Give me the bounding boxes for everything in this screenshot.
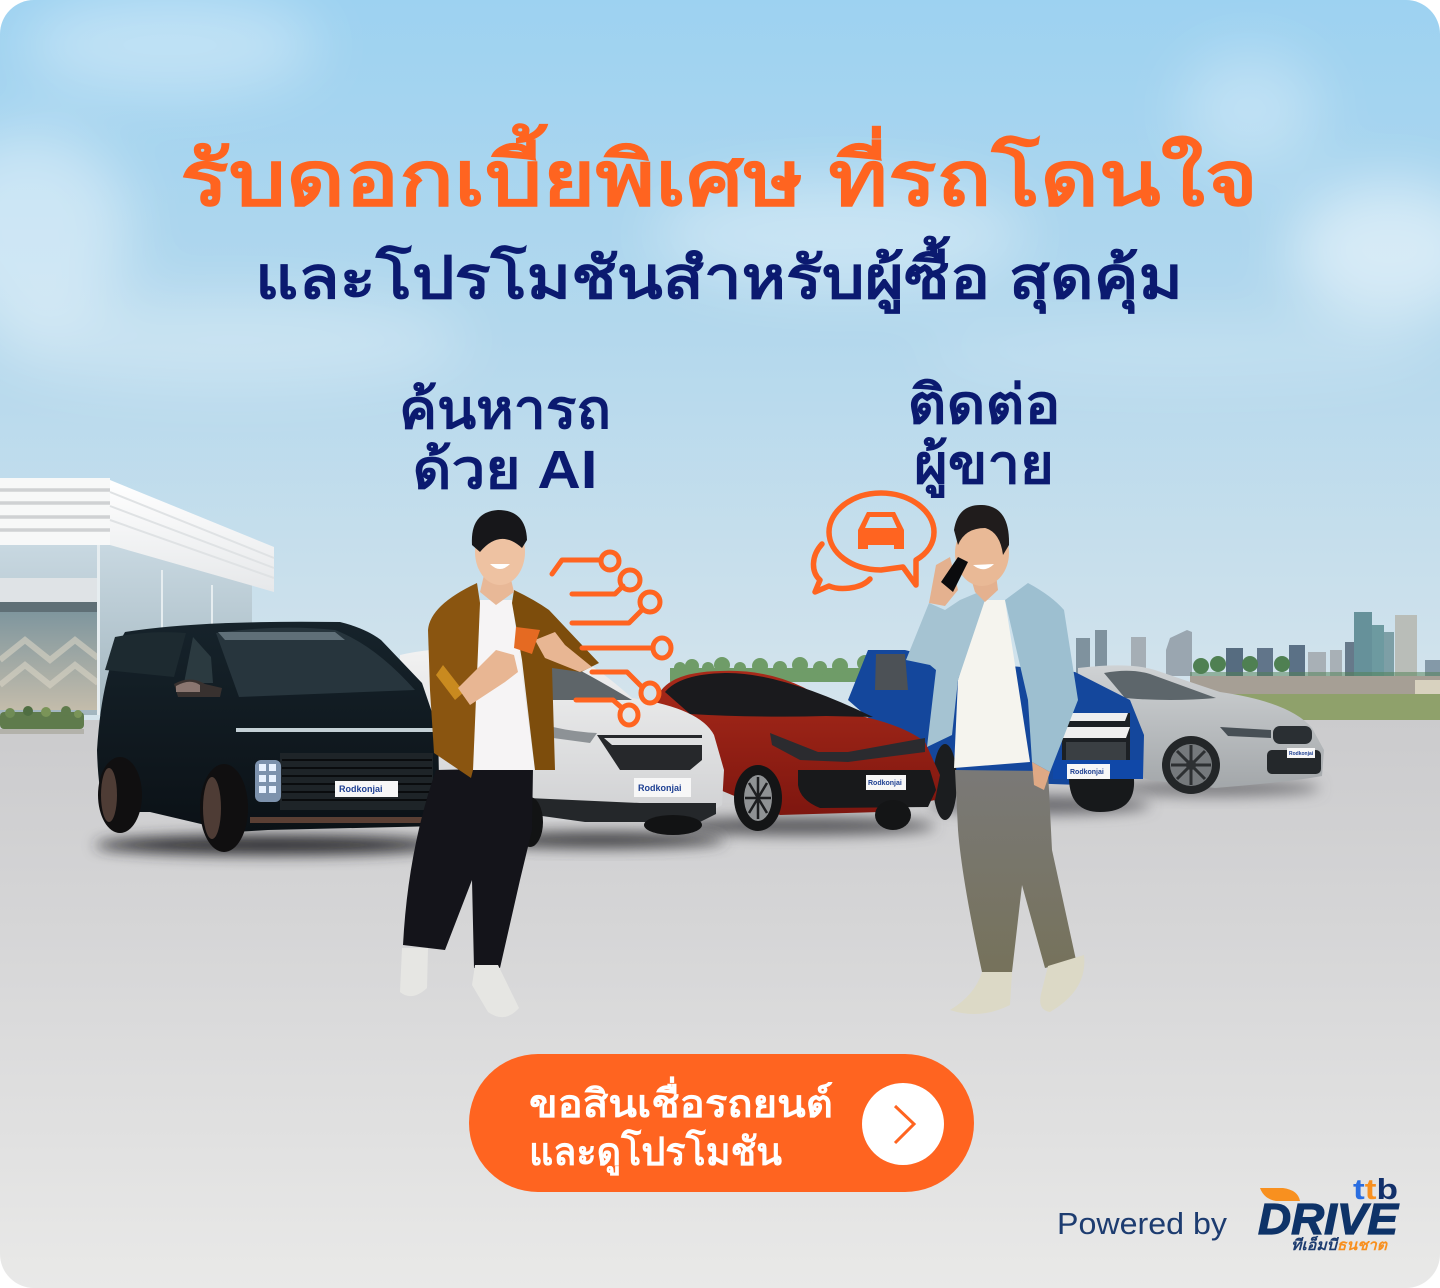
neck — [480, 575, 514, 605]
logo: ttb DRIVE: ทีเอ็มบีธนชาต — [1291, 1235, 1388, 1254]
shoes — [950, 955, 1084, 1014]
label: search car with AI: ด้วย AI — [412, 440, 598, 500]
label: contact seller: ติดต่อ — [908, 375, 1060, 435]
city skyline — [1076, 612, 1440, 694]
person: man on phone in blue shirt — [906, 505, 1084, 1014]
left sleeve cuff — [436, 665, 464, 700]
powered by label: Powered by — [1057, 1206, 1228, 1241]
head — [955, 520, 1009, 586]
person: man with phone and brown shirt — [400, 510, 599, 1017]
icon: AI circuit lines — [552, 552, 671, 725]
plate: red car: Rodkonjai — [868, 780, 902, 787]
head — [475, 519, 525, 585]
white tee — [954, 600, 1030, 768]
neck — [970, 575, 998, 602]
bush planter — [0, 706, 84, 734]
white SUV — [400, 648, 725, 848]
blue pickup truck — [848, 650, 1150, 820]
label: contact seller: ผู้ขาย — [914, 435, 1054, 498]
hand in pocket — [1032, 762, 1050, 790]
icon: arrow circle — [862, 1083, 944, 1165]
button: apply for car loan — [469, 1054, 974, 1192]
plate: BMW — [1287, 748, 1315, 758]
silver BMW sedan — [1078, 665, 1324, 796]
forearms and hands — [458, 632, 592, 705]
hair — [472, 510, 527, 552]
plate: BMW: Rodkonjai — [1289, 751, 1314, 757]
plate: van: Rodkonjai — [339, 784, 383, 794]
trousers — [403, 768, 533, 968]
building showroom — [0, 478, 274, 715]
hair — [954, 505, 1009, 555]
plate: white SUV: Rodkonjai — [638, 783, 682, 793]
shirt right panel — [1005, 583, 1078, 772]
sky background — [0, 0, 1440, 730]
plate: pickup: Rodkonjai — [1070, 769, 1104, 776]
shirt left panel — [906, 592, 985, 747]
red hatchback — [655, 671, 940, 835]
label: search car with AI: ค้นหารถ — [399, 380, 611, 440]
shirt right panel — [512, 590, 599, 770]
shoes — [400, 948, 519, 1017]
plate: white SUV — [634, 778, 691, 797]
hand — [929, 557, 958, 606]
button text: และดูโปรโมชัน — [529, 1129, 782, 1176]
black van — [95, 622, 445, 855]
icon: chat bubble with car — [813, 493, 934, 592]
subtitle: และโปรโมชันสำหรับผู้ซื้อ สุดคุ้ม — [255, 236, 1183, 315]
plate: van — [335, 781, 398, 797]
grass strip — [1232, 694, 1440, 720]
phone — [941, 557, 968, 592]
title: รับดอกเบี้ยพิเศษ ที่รถโดนใจ — [180, 123, 1258, 222]
phone — [514, 627, 540, 654]
logo: ttb DRIVE: DRIVE — [1258, 1195, 1400, 1244]
white tee — [473, 600, 535, 770]
tree line — [670, 655, 880, 682]
plate: red car — [866, 775, 906, 790]
ground — [0, 720, 1440, 1288]
trousers — [955, 770, 1076, 972]
label: contact seller — [908, 375, 1060, 498]
logo: ttb DRIVE — [1258, 1174, 1400, 1254]
label: search car with AI — [399, 380, 611, 500]
shirt left panel — [428, 583, 480, 778]
smile — [973, 564, 994, 569]
button text: ขอสินเชื่อรถยนต์ — [529, 1076, 833, 1126]
plate: pickup — [1067, 764, 1110, 779]
smile — [490, 564, 510, 569]
button text — [529, 1076, 833, 1176]
logo: ttb DRIVE: ttb — [1353, 1174, 1398, 1206]
